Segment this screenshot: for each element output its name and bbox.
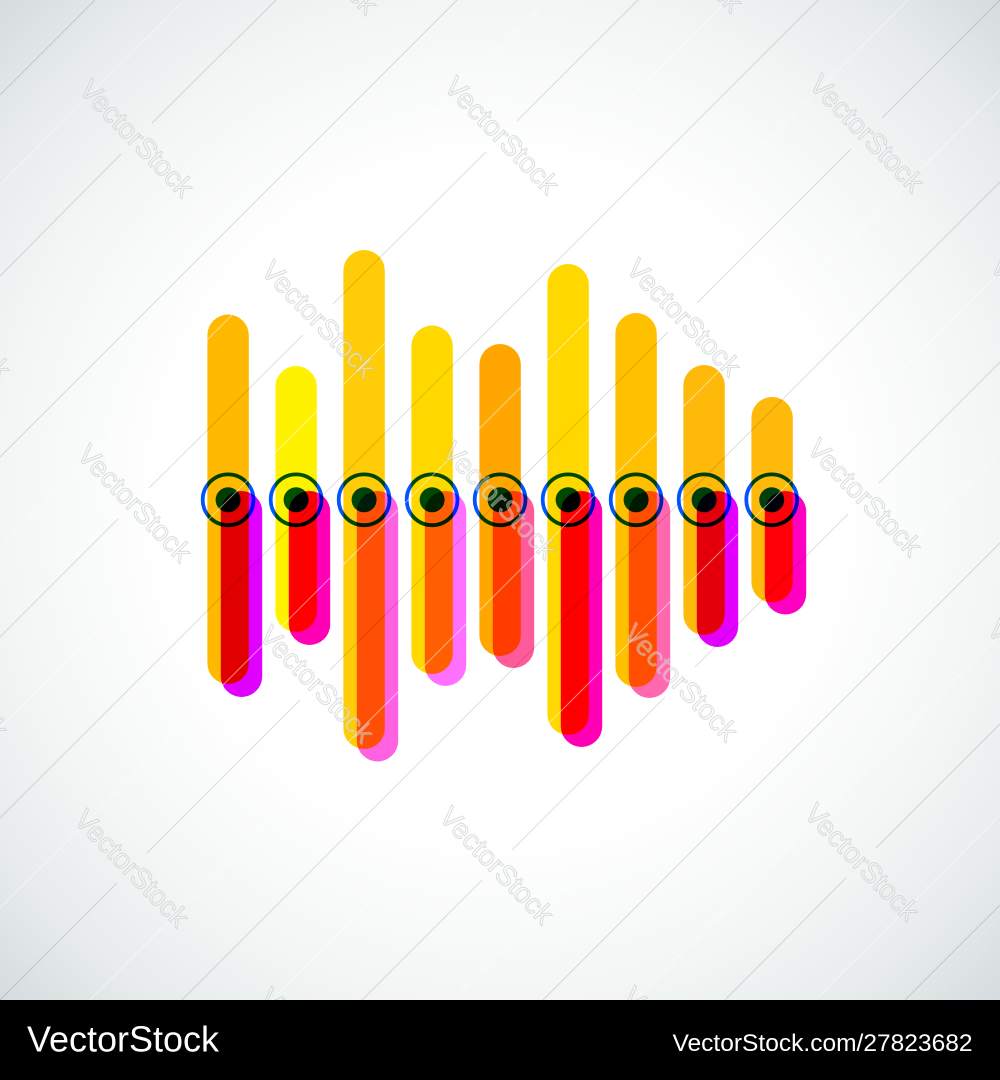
VectorStock diagonal watermarks: VectorStock (255, 255, 383, 385)
VectorStock diagonal watermarks: VectorStock (438, 71, 566, 201)
upper yellow bars (207, 250, 793, 749)
VectorStock diagonal watermarks: VectorStock (73, 74, 201, 204)
VectorStock diagonal watermarks: VectorStock (68, 804, 196, 934)
footer image URL: VectorStock.com/27823682 (672, 1030, 972, 1057)
VectorStock diagonal watermarks: VectorStock (798, 798, 926, 928)
VectorStock diagonal watermarks: VectorStock (71, 439, 199, 569)
VectorStock diagonal watermarks: VectorStock (433, 801, 561, 931)
footer bar (0, 1000, 1000, 1080)
VectorStock diagonal watermarks: VectorStock (253, 620, 381, 750)
VectorStock diagonal watermarks: VectorStock (436, 436, 564, 566)
ring and dot markers (203, 474, 797, 525)
lower magenta bars (221, 491, 806, 762)
VectorStock diagonal watermarks: VectorStock (803, 69, 931, 199)
VectorStock diagonal watermarks: VectorStock (617, 618, 745, 748)
VectorStock diagonal watermarks: VectorStock (620, 253, 748, 383)
footer brand name: VectorStock (27, 1018, 220, 1060)
sound wave bar chart (203, 250, 806, 762)
VectorStock diagonal watermarks: VectorStock (801, 433, 929, 563)
